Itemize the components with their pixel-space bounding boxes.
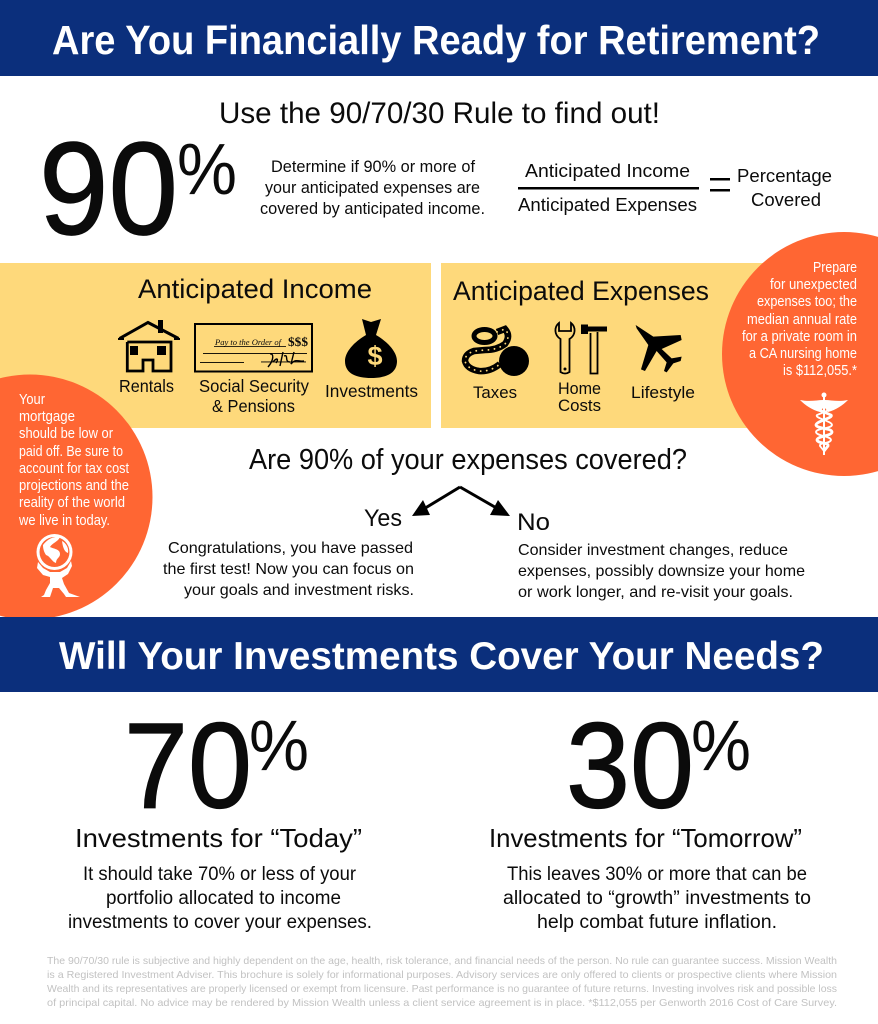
- label: social security and pensions: [199, 376, 309, 416]
- arrows: yes and no branches: [412, 487, 510, 516]
- label: home costs: Home: [558, 379, 601, 398]
- heading: anticipated income: Anticipated Income: [138, 274, 372, 304]
- text block: no outcome: [518, 542, 805, 601]
- disclaimer footer: Wealth and its representatives are properly licensed or exempt from licensure. Past performance is no guarantee of future returns. Investing involves risk and possible loss: [47, 983, 837, 995]
- text block: no outcome: Consider investment changes, reduce: [518, 542, 788, 559]
- icon: check: $$$: [288, 334, 309, 349]
- callout text: nursing home cost: for a private room in: [742, 329, 857, 345]
- big stat: 90 percent: 90: [39, 115, 178, 262]
- label: social security and pensions: & Pensions: [212, 396, 295, 416]
- icon: atlas holding globe: [36, 534, 80, 597]
- text block: 90 percent rule description: [260, 158, 485, 218]
- branch: no: No: [517, 509, 550, 536]
- big stat: 30 percent: %: [691, 707, 751, 786]
- icon: check: Pay to the Order of: [214, 337, 283, 347]
- branch: no: [517, 509, 805, 601]
- callout text: mortgage: should be low or: [19, 426, 113, 442]
- icon: ball and chain: [465, 329, 529, 376]
- formula: income over expenses equals percentage covered: [518, 160, 832, 215]
- question heading: Are 90% of your expenses covered?: [249, 444, 687, 476]
- callout text: mortgage: we live in today.: [18, 513, 110, 529]
- text block: tomorrow explanation: help combat future inflation.: [537, 912, 777, 933]
- disclaimer footer: The 90/70/30 rule is subjective and highly dependent on the age, health, risk tolerance, and financial needs of the person. No rule can guarantee success. Mission Wealth: [47, 955, 837, 967]
- label: home costs: Costs: [558, 396, 601, 415]
- branch: yes: [163, 505, 414, 599]
- text block: tomorrow explanation: [503, 864, 811, 933]
- big stat: 30 percent: 30: [566, 698, 694, 834]
- text block: 90 percent rule description: your anticipated expenses are: [265, 179, 480, 197]
- label: taxes: Taxes: [473, 383, 517, 402]
- section band: investments heading: Will Your Investments Cover Your Needs?: [59, 635, 824, 678]
- callout text: nursing home cost: Prepare: [813, 260, 857, 276]
- text block: yes outcome: your goals and investment risks.: [184, 582, 414, 599]
- callout text: mortgage: paid off. Be sure to: [19, 444, 123, 460]
- label: social security and pensions: Social Security: [199, 376, 309, 396]
- panel: anticipated income: [0, 263, 431, 428]
- icon: money bag: [345, 319, 397, 378]
- callout text: nursing home cost: for unexpected: [770, 277, 857, 293]
- heading: investments for today: Investments for “Today”: [75, 823, 362, 853]
- text block: today explanation: investments to cover your expenses.: [68, 912, 372, 933]
- callout: mortgage advice: [0, 374, 152, 620]
- callout text: mortgage: reality of the world: [19, 495, 125, 511]
- callout text: mortgage: [18, 392, 129, 529]
- callout text: mortgage: Your: [19, 392, 45, 408]
- icon: wrench and hammer: [555, 323, 607, 374]
- section band: investments heading: [0, 617, 878, 692]
- icon: money bag: $: [367, 341, 383, 371]
- callout text: nursing home cost: expenses too; the: [757, 294, 857, 310]
- callout text: nursing home cost: is $112,055.*: [783, 363, 857, 379]
- text block: yes outcome: Congratulations, you have passed: [168, 540, 413, 557]
- formula: income over expenses equals percentage covered: Anticipated Income: [525, 160, 690, 181]
- label: home costs: [558, 379, 601, 415]
- disclaimer footer: [47, 955, 837, 1009]
- label: lifestyle: Lifestyle: [631, 383, 695, 402]
- branch: yes: Yes: [364, 505, 402, 532]
- subtitle: Use the 90/70/30 Rule to find out!: [219, 97, 660, 130]
- disclaimer footer: of principal capital. No advice may be rendered by Mission Wealth unless a client service agreement is in place. *$112,055 per Genworth 2016 Cost of Care Survey.: [47, 997, 837, 1009]
- text block: yes outcome: [163, 540, 414, 599]
- text block: today explanation: [68, 864, 372, 933]
- icon: caduceus: [800, 392, 848, 455]
- text block: today explanation: portfolio allocated to income: [106, 888, 341, 909]
- icon: check: [195, 324, 312, 372]
- label: rentals: Rentals: [119, 376, 174, 396]
- header band: title: [0, 0, 878, 76]
- callout text: nursing home cost: [742, 260, 857, 379]
- heading: anticipated expenses: Anticipated Expenses: [453, 276, 709, 306]
- label: investments: Investments: [325, 381, 418, 401]
- callout text: nursing home cost: a CA nursing home: [749, 346, 857, 362]
- text block: no outcome: or work longer, and re-visit your goals.: [518, 584, 793, 601]
- text block: no outcome: expenses, possibly downsize your home: [518, 563, 805, 580]
- text block: tomorrow explanation: This leaves 30% or more that can be: [507, 864, 807, 885]
- text block: tomorrow explanation: allocated to “growth” investments to: [503, 888, 811, 909]
- icon: airplane: [636, 325, 682, 372]
- callout text: mortgage: account for tax cost: [19, 461, 129, 477]
- column: 70 percent for today: [68, 698, 372, 933]
- callout text: mortgage: projections and the: [19, 478, 129, 494]
- icon: house: [118, 320, 180, 371]
- formula: income over expenses equals percentage covered: Covered: [751, 189, 821, 210]
- big stat: 90 percent: %: [177, 130, 237, 210]
- formula: income over expenses equals percentage covered: Percentage: [737, 165, 832, 186]
- heading: investments for tomorrow: Investments for “Tomorrow”: [489, 823, 802, 853]
- disclaimer footer: is a Registered Investment Adviser. This brochure is solely for informational purposes. Advisory services are only offered to clients or prospective clients where Mission: [47, 969, 837, 981]
- callout text: mortgage: mortgage: [19, 409, 75, 425]
- header band: title: Are You Financially Ready for Retirement?: [52, 17, 820, 63]
- text block: today explanation: It should take 70% or less of your: [83, 864, 357, 885]
- formula: income over expenses equals percentage covered: Anticipated Expenses: [518, 194, 697, 215]
- text block: yes outcome: the first test! Now you can focus on: [163, 561, 414, 578]
- big stat: 70 percent: %: [249, 707, 309, 786]
- panel: anticipated expenses: [441, 263, 811, 428]
- big stat: 70 percent: 70: [124, 698, 252, 834]
- callout: unexpected expenses: [722, 232, 878, 476]
- column: 30 percent for tomorrow: [489, 698, 811, 933]
- text block: 90 percent rule description: covered by anticipated income.: [260, 200, 485, 218]
- callout text: nursing home cost: median annual rate: [747, 312, 857, 328]
- text block: 90 percent rule description: Determine if 90% or more of: [271, 158, 475, 176]
